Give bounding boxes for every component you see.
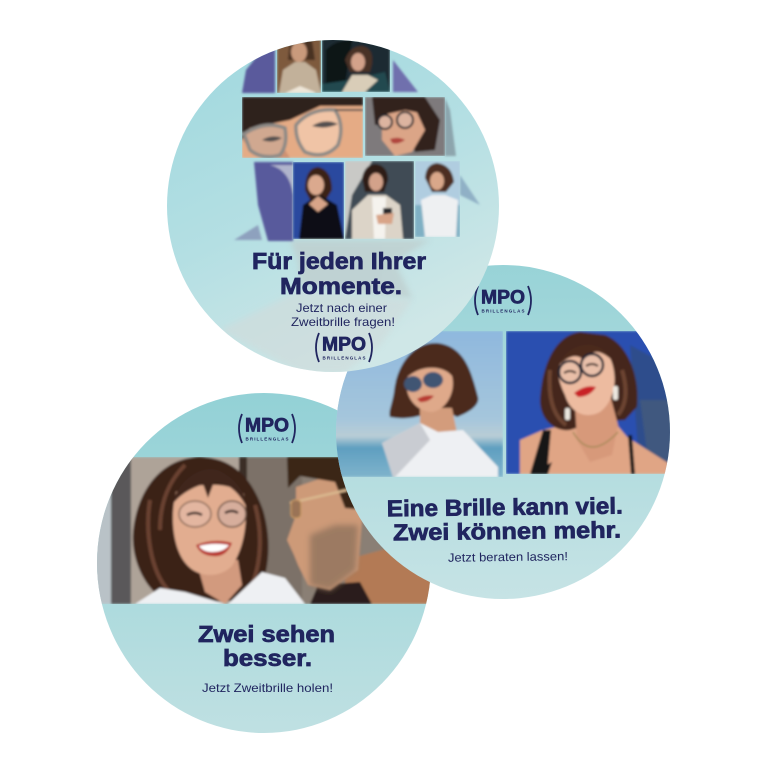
text: Jetzt Zweitbrille holen: Jetzt Zweitbrille holen! — [202, 681, 333, 695]
heading: Zwei sehen besser: besser. — [223, 645, 312, 671]
heading: Zwei sehen besser: Zwei sehen — [198, 621, 335, 647]
photo: woman with black glasses — [365, 97, 445, 156]
decoration: soft silhouette behind text — [228, 240, 424, 338]
panel: coaster Zwei sehen besser — [90, 393, 440, 733]
photo: woman in blazer with phone — [345, 161, 414, 239]
logo: MPO right coaster — [475, 286, 531, 315]
photo: woman with glasses on blue — [506, 331, 676, 474]
photo: reading — [277, 37, 321, 93]
photo: car — [322, 37, 390, 92]
heading: Eine Brille kann viel — [387, 493, 623, 545]
heading: Eine Brille kann viel: Zwei können mehr. — [393, 517, 621, 545]
text: Jetzt nach einer Zweitbrille fragen: Zweitbrille fragen! — [291, 315, 395, 329]
text: Jetzt nach einer Zweitbrille fragen — [291, 301, 395, 329]
heading: Für jeden Ihrer Momente: Für jeden Ihrer — [252, 248, 426, 274]
panel: coaster Eine Brille kann viel — [330, 265, 676, 599]
photo: woman with sunglasses at the sea — [330, 331, 676, 477]
logo: MPO right coaster: MPO — [481, 288, 525, 308]
photo: woman in black on blue — [293, 162, 344, 239]
photo: woman in white shirt — [415, 161, 460, 237]
logo: MPO left coaster — [239, 414, 295, 443]
logo: MPO top coaster — [316, 333, 372, 362]
heading: Für jeden Ihrer Momente — [252, 248, 426, 299]
text: Jetzt beraten lassen: Jetzt beraten lassen! — [448, 549, 568, 565]
logo: MPO top coaster: MPO — [322, 334, 366, 356]
logo: MPO left coaster: BRILLENGLAS — [246, 436, 288, 442]
portrait collage — [234, 37, 480, 241]
photo: couple — [90, 457, 440, 604]
logo: MPO top coaster: BRILLENGLAS — [322, 356, 366, 360]
photo: glasses close-up — [242, 97, 363, 158]
panel: coaster Für jeden Ihrer Momente — [167, 37, 499, 372]
heading: Zwei sehen besser — [198, 621, 335, 671]
logo: MPO right coaster: BRILLENGLAS — [482, 308, 524, 314]
text: Jetzt nach einer Zweitbrille fragen: Jetzt nach einer — [296, 301, 387, 315]
heading: Eine Brille kann viel: Eine Brille kann viel. — [387, 493, 623, 521]
heading: Für jeden Ihrer Momente: Momente. — [280, 273, 402, 299]
halftone portrait segments — [234, 44, 480, 241]
logo: MPO left coaster: MPO — [245, 416, 289, 436]
